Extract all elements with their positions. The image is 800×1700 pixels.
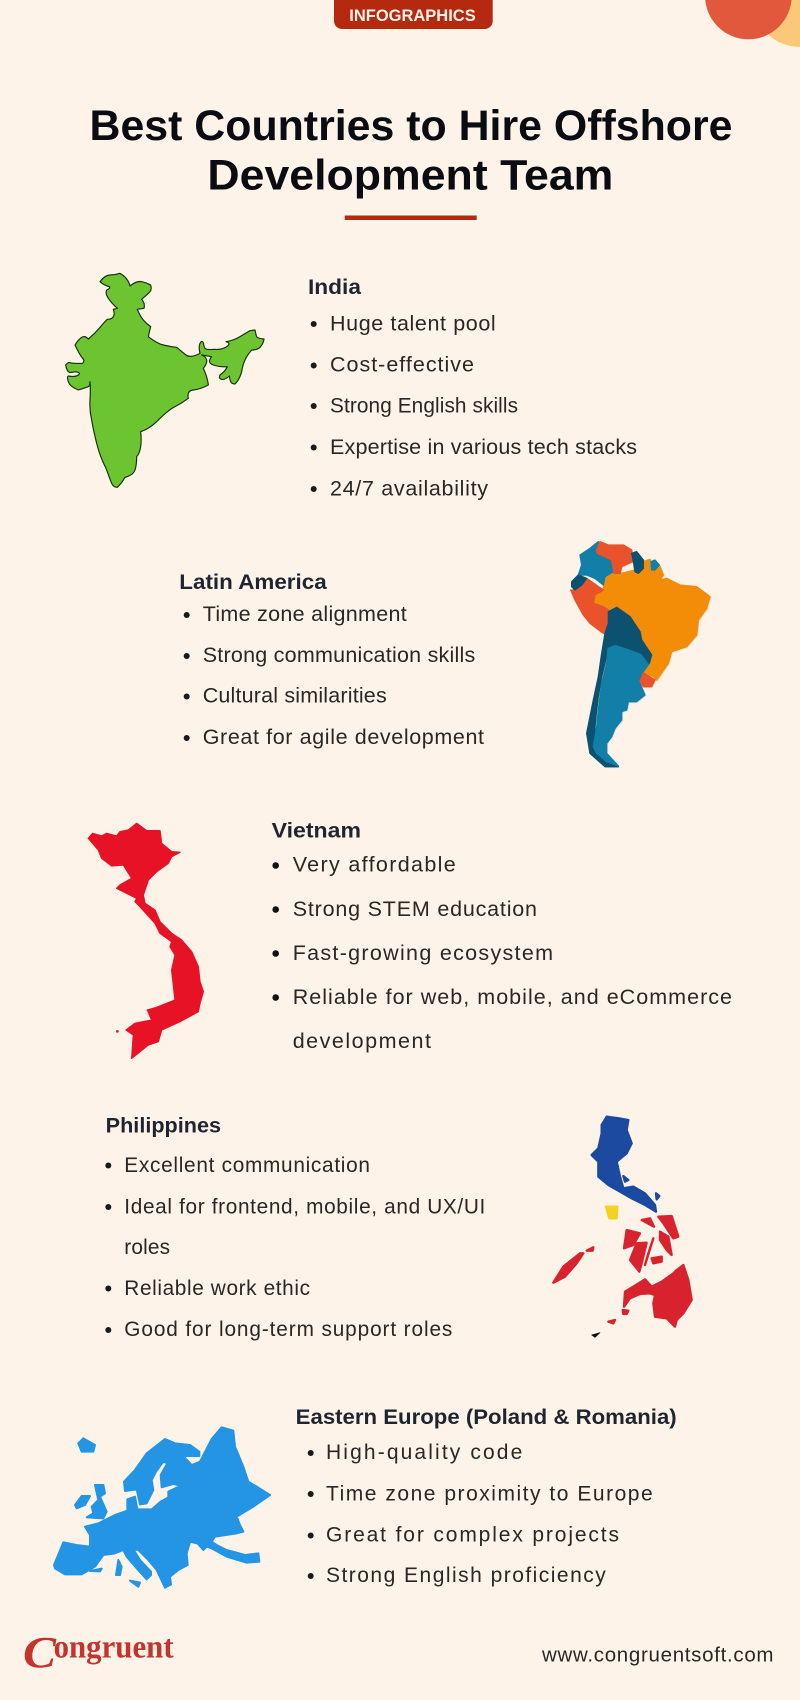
website url: www.congruentsoft.com — [541, 1644, 774, 1667]
panel: Philippines — [105, 1115, 485, 1341]
icon: India map — [66, 273, 264, 487]
Luzon — [592, 1117, 659, 1212]
logo: Congruent: ongruent — [54, 1630, 174, 1666]
list: Eastern Europe benefits: Great for complex projects — [326, 1524, 619, 1547]
list: India benefits: 24/7 availability — [330, 477, 488, 501]
list: Eastern Europe benefits: Strong English proficiency — [326, 1564, 606, 1587]
Chile — [587, 633, 618, 767]
Sardinia and Corsica — [116, 1560, 122, 1575]
list: Philippines benefits: Good for long-term support roles — [124, 1318, 452, 1341]
list: Latin America benefits: Cultural similarities — [203, 684, 387, 708]
panel: Eastern Europe — [296, 1406, 677, 1587]
Ireland — [75, 1496, 90, 1508]
logo: Congruent: C — [23, 1628, 57, 1677]
list: Eastern Europe benefits: High-quality code — [326, 1441, 522, 1464]
list: Philippines benefits: Reliable work ethic — [124, 1277, 310, 1300]
Venezuela — [597, 542, 633, 573]
list: India benefits: Cost-effective — [330, 353, 474, 377]
Visayas and Mindanao — [553, 1216, 692, 1327]
Colombia — [578, 542, 613, 585]
list: Philippines benefits: roles — [124, 1236, 170, 1259]
French Guiana — [651, 560, 659, 570]
Iceland — [78, 1438, 95, 1452]
icon: Europe map — [54, 1427, 270, 1588]
list: Philippines benefits: Excellent communication — [124, 1154, 370, 1177]
Argentina — [593, 644, 649, 766]
title: Development Team — [207, 152, 613, 200]
title — [90, 102, 732, 200]
list: Vietnam benefits — [272, 853, 732, 1053]
Uruguay — [640, 673, 655, 687]
Bolivia and Paraguay — [605, 607, 652, 663]
panel: India — [308, 276, 637, 501]
list: Eastern Europe benefits: Time zone proximity to Europe — [326, 1482, 653, 1505]
Brazil — [593, 559, 710, 680]
list: Philippines benefits — [105, 1154, 485, 1341]
list: Vietnam benefits: Reliable for web, mobile, and eCommerce — [293, 985, 732, 1009]
title: Best Countries to Hire Offshore — [90, 102, 732, 150]
badge: infographics — [334, 0, 493, 29]
panel: Vietnam — [272, 820, 732, 1053]
Guyana — [632, 552, 643, 573]
list: Vietnam benefits: Very affordable — [293, 853, 456, 877]
logo: Congruent — [23, 1628, 174, 1677]
Peru — [571, 578, 608, 633]
Great Britain — [87, 1485, 107, 1518]
list: India benefits: Expertise in various tech stacks — [330, 435, 637, 459]
list: Latin America benefits — [184, 602, 484, 749]
heading: Vietnam: Vietnam — [272, 820, 361, 843]
Crimea — [198, 1537, 214, 1550]
list: Vietnam benefits: Fast-growing ecosystem — [293, 941, 553, 965]
heading: India: India — [308, 276, 361, 299]
list: Philippines benefits: Ideal for frontend, mobile, and UX/UI — [124, 1195, 485, 1218]
Ecuador — [572, 575, 587, 590]
icon: Vietnam map — [88, 823, 203, 1058]
title underline — [345, 216, 477, 220]
list: India benefits: Strong English skills — [330, 395, 518, 418]
list: Latin America benefits: Great for agile development — [203, 725, 484, 749]
decorative corner circles — [705, 0, 800, 47]
icon: Philippines map — [553, 1117, 692, 1337]
list: Vietnam benefits: development — [293, 1029, 431, 1053]
heading: Latin America: Latin America — [179, 571, 327, 594]
icon: South America map — [571, 542, 710, 767]
list: India benefits: Huge talent pool — [330, 312, 496, 336]
list: India benefits — [311, 312, 637, 501]
panel: Latin America — [179, 571, 484, 749]
Sicily — [130, 1581, 140, 1587]
heading: Philippines: Philippines — [106, 1115, 221, 1138]
list: Vietnam benefits: Strong STEM education — [293, 897, 537, 921]
list: Latin America benefits: Time zone alignment — [203, 602, 407, 626]
southern islets — [592, 1333, 600, 1337]
Visayas center star — [606, 1207, 617, 1218]
list: Latin America benefits: Strong communication skills — [203, 643, 475, 667]
badge: infographics: INFOGRAPHICS — [349, 7, 476, 25]
list: Eastern Europe benefits — [308, 1441, 653, 1587]
heading: Eastern Europe: Eastern Europe (Poland & Romania) — [296, 1406, 677, 1429]
mainland Europe — [54, 1427, 270, 1588]
Balearic islands — [90, 1569, 102, 1571]
